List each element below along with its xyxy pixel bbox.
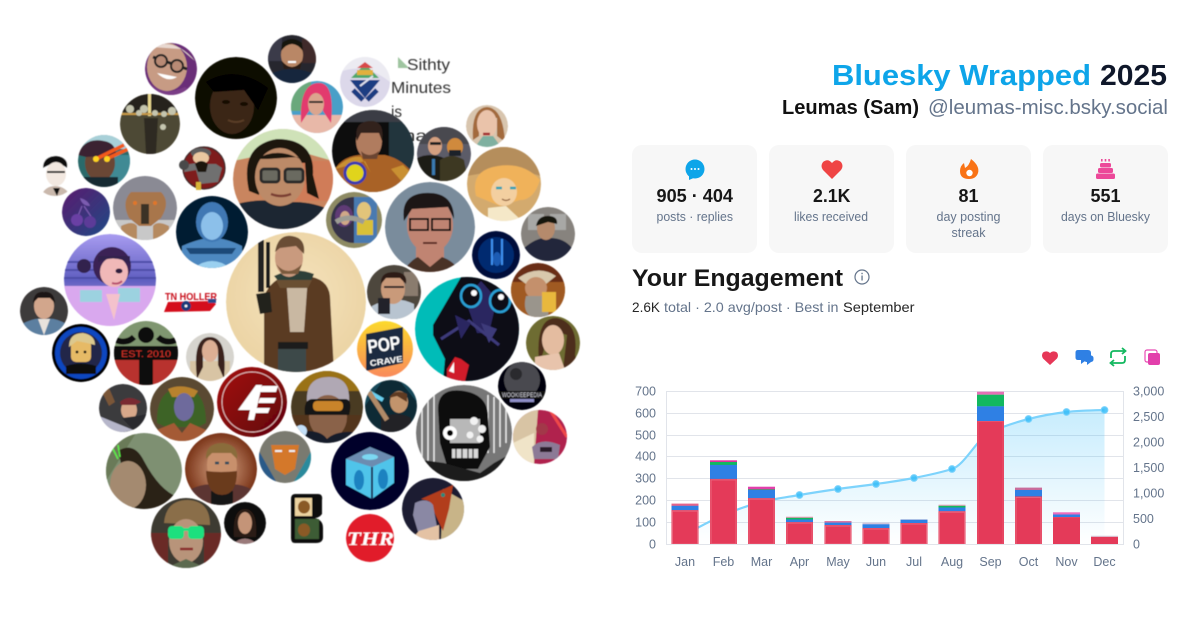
avatar: pop crave logo: [357, 321, 413, 377]
broken image alt text: [391, 57, 451, 145]
avatar: space pilot portrait: [332, 110, 415, 192]
right axis labels: 1,500: [1133, 461, 1164, 475]
profile name and handle: @leumas-misc.bsky.social: [928, 97, 1168, 119]
avatar: suit man: [20, 287, 68, 335]
engagement summary: September: [843, 299, 915, 315]
avatar: beer man: [511, 263, 565, 317]
avatar: rainbow diamond logo: [340, 57, 390, 107]
icon: info: [855, 270, 869, 284]
title: 2025: [1100, 60, 1167, 92]
broken image alt text: Minutes: [391, 80, 451, 97]
avatar: pop crave logo: CRAVE: [369, 354, 404, 368]
panel: days on Bluesky: 551: [1090, 186, 1120, 206]
icon: reposts: [1110, 348, 1126, 366]
icon: chat bubble: [686, 160, 704, 180]
month labels: Jan: [675, 555, 695, 569]
avatar: hologram woman: [176, 196, 248, 268]
avatar: green glasses woman: [151, 498, 221, 568]
bar: Jan: [672, 504, 698, 544]
month labels: Nov: [1055, 555, 1078, 569]
avatar: green haired woman: [150, 377, 214, 441]
avatar: two men at convention: [417, 127, 471, 181]
month labels: Jun: [866, 555, 886, 569]
icon: cake: [1096, 159, 1115, 179]
right axis labels: 2,000: [1133, 436, 1164, 450]
panel: day posting streak: 81: [958, 186, 978, 206]
month labels: Oct: [1019, 555, 1039, 569]
heading: your engagement: Your Engagement: [632, 265, 843, 292]
avatar: lego figure: [52, 324, 110, 382]
bar: May: [824, 521, 852, 544]
icon: quotes: [1145, 350, 1160, 365]
avatar: ahsoka mosaic: [259, 431, 311, 483]
month labels: Apr: [790, 555, 809, 569]
right axis labels: 0: [1133, 538, 1140, 552]
right axis labels: 500: [1133, 512, 1154, 526]
logo: TN Holler: [164, 291, 217, 312]
panel: likes received: [769, 145, 894, 253]
grid: [666, 391, 1124, 544]
avatar: woman with wavy brown hair: [526, 316, 580, 370]
avatar: green-lit man: [106, 433, 182, 509]
logo: THR: THR: [347, 529, 394, 550]
left axis labels: 500: [635, 428, 656, 442]
avatar: man in jacket outdoors: [521, 207, 575, 261]
icon: heart: [822, 160, 842, 179]
avatar: red lit room: [513, 410, 567, 464]
avatar: droid: [113, 176, 177, 240]
right axis labels: [1133, 384, 1164, 552]
avatar: pilot woman cartoon: [99, 384, 147, 432]
bar: Jun: [862, 523, 890, 544]
avatar: man with glasses outdoors: [233, 129, 333, 229]
panel: posts and replies: 905 · 404: [656, 186, 733, 206]
right axis labels: 2,500: [1133, 410, 1164, 424]
chart: monthly engagement: [635, 384, 1164, 569]
title: Bluesky Wrapped: [832, 60, 1091, 92]
broken image alt text: is: [391, 104, 402, 121]
month labels: Sep: [979, 555, 1002, 569]
panel: days on Bluesky: [1043, 145, 1168, 253]
avatar: vader with glasses: [415, 277, 519, 381]
cumulative line: [685, 410, 1104, 534]
left axis labels: [635, 384, 656, 552]
avatar: vault boy: [179, 147, 225, 190]
bar: Sep: [977, 392, 1004, 544]
engagement summary: [632, 299, 915, 315]
month labels: Feb: [713, 555, 734, 569]
month labels: Jul: [906, 555, 922, 569]
avatar: pink hair woman: [291, 81, 343, 135]
avatar: glasses man: [145, 43, 197, 99]
avatar: red helmet warrior: [402, 478, 464, 540]
avatar: sketch man: [42, 155, 68, 196]
avatar: blue saber man: [365, 380, 417, 432]
avatar: mandalorian helmet logo: EST. 2010: [121, 349, 171, 360]
left axis labels: 300: [635, 472, 656, 486]
left axis labels: 700: [635, 384, 656, 398]
left axis labels: 200: [635, 494, 656, 508]
avatar: laser eyes man: [78, 135, 130, 187]
avatar: helmeted pilot: [291, 371, 363, 443]
month labels: May: [826, 555, 851, 569]
logo: TN Holler: TN HOLLER: [165, 291, 217, 303]
panel: day posting streak: streak: [952, 226, 986, 240]
avatar: mandalorian helmet logo: [114, 321, 178, 386]
left axis labels: 0: [649, 538, 656, 552]
chart legend: [1042, 348, 1160, 366]
engagement summary: 2.6K: [632, 299, 661, 315]
avatar: skeleton soldiers: [120, 94, 180, 154]
avatar: death star wookieepedia: [498, 362, 546, 410]
avatar: man in dark: [195, 57, 277, 139]
bar: Nov: [1053, 512, 1080, 544]
avatar: blue cage: [472, 231, 520, 279]
engagement summary: total · 2.0 avg/post · Best in: [664, 299, 838, 315]
bar: Oct: [1015, 488, 1042, 544]
left axis labels: 400: [635, 450, 656, 464]
avatar: cherries: [62, 188, 110, 236]
avatar: holocron cube: [331, 432, 409, 510]
month labels: Dec: [1093, 555, 1116, 569]
bar: Aug: [938, 505, 966, 544]
avatar: red-haired woman: [466, 105, 508, 147]
logo: B emblem: [291, 494, 323, 543]
right axis labels: 1,000: [1133, 486, 1164, 500]
avatar: smiling bearded man: [268, 35, 316, 83]
avatar: main profile man: [226, 232, 366, 372]
broken image alt text: Sithty: [407, 57, 450, 74]
broken image alt text: Tha: [391, 128, 427, 145]
bar: Dec: [1091, 536, 1118, 544]
avatar: DF logo: [217, 367, 287, 437]
line points: [796, 407, 1108, 498]
bar: Mar: [748, 487, 775, 544]
profile name and handle: [782, 97, 1168, 119]
panel: posts and replies: [632, 145, 757, 253]
panel: posts and replies: posts · replies: [656, 210, 733, 224]
avatar bubble cluster: [20, 35, 580, 568]
left axis labels: 100: [635, 516, 656, 530]
avatar: man with phone selfie: [367, 265, 421, 319]
logo: THR: [346, 514, 394, 562]
avatar: bearded man illustration: [185, 433, 257, 505]
avatar: dark-haired woman: [224, 502, 266, 544]
profile name and handle: Leumas (Sam): [782, 97, 919, 119]
avatar: man with medallion frame: [326, 192, 382, 248]
right axis labels: 3,000: [1133, 384, 1164, 398]
avatar: long-haired woman: [186, 333, 234, 381]
stacked bars: likes, replies, reposts, quotes: [672, 392, 1118, 544]
avatar: death star wookieepedia: WOOKIEEPEDIA: [502, 393, 542, 399]
bar: Apr: [786, 517, 813, 544]
avatar: pop crave logo: POP: [366, 333, 402, 358]
avatar: princess cartoon: [64, 234, 156, 326]
panel: likes received: 2.1K: [813, 186, 850, 206]
cumulative area: [685, 410, 1104, 544]
month labels: Aug: [941, 555, 963, 569]
bar: Jul: [900, 519, 928, 544]
left axis labels: 600: [635, 406, 656, 420]
month labels: Mar: [751, 555, 772, 569]
panel: day posting streak: day posting: [936, 210, 1001, 224]
month labels: [675, 555, 1116, 569]
icon: likes heart: [1042, 351, 1058, 365]
avatar: woodcut skull man: [416, 385, 512, 481]
panel: likes received: likes received: [794, 210, 868, 224]
avatar: cartoon man with glasses: [385, 182, 475, 272]
bar: Feb: [710, 460, 737, 544]
panel: day posting streak: [906, 145, 1031, 253]
icon: flame: [960, 159, 978, 179]
icon: replies chat: [1076, 350, 1094, 365]
panel: days on Bluesky: days on Bluesky: [1061, 210, 1151, 224]
avatar: blonde cartoon character: [467, 147, 541, 221]
